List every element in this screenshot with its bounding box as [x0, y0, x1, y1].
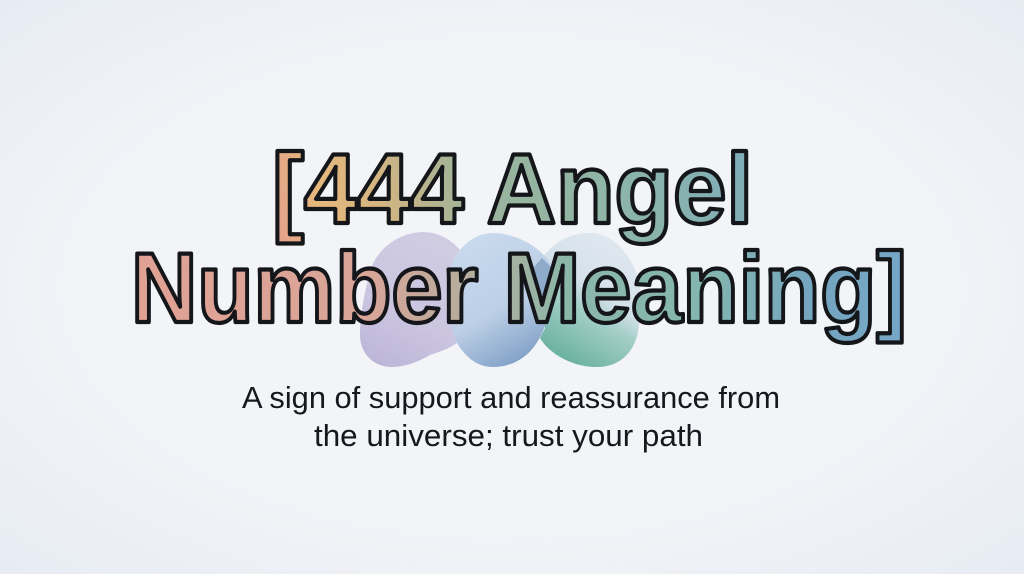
subtitle line 2: the universe; trust your path	[314, 418, 703, 453]
blob: green	[533, 233, 641, 367]
subtitle line 1: A sign of support and reassurance from	[242, 380, 780, 415]
blob: purple	[360, 232, 460, 367]
subtitle	[242, 380, 780, 453]
title line 1: [444 Angel	[272, 133, 753, 244]
title	[131, 133, 907, 343]
title line 2: Number Meaning]	[131, 232, 907, 343]
blob overlap	[533, 258, 554, 325]
blob: blue	[449, 233, 554, 367]
overlapping blobs	[360, 232, 641, 367]
